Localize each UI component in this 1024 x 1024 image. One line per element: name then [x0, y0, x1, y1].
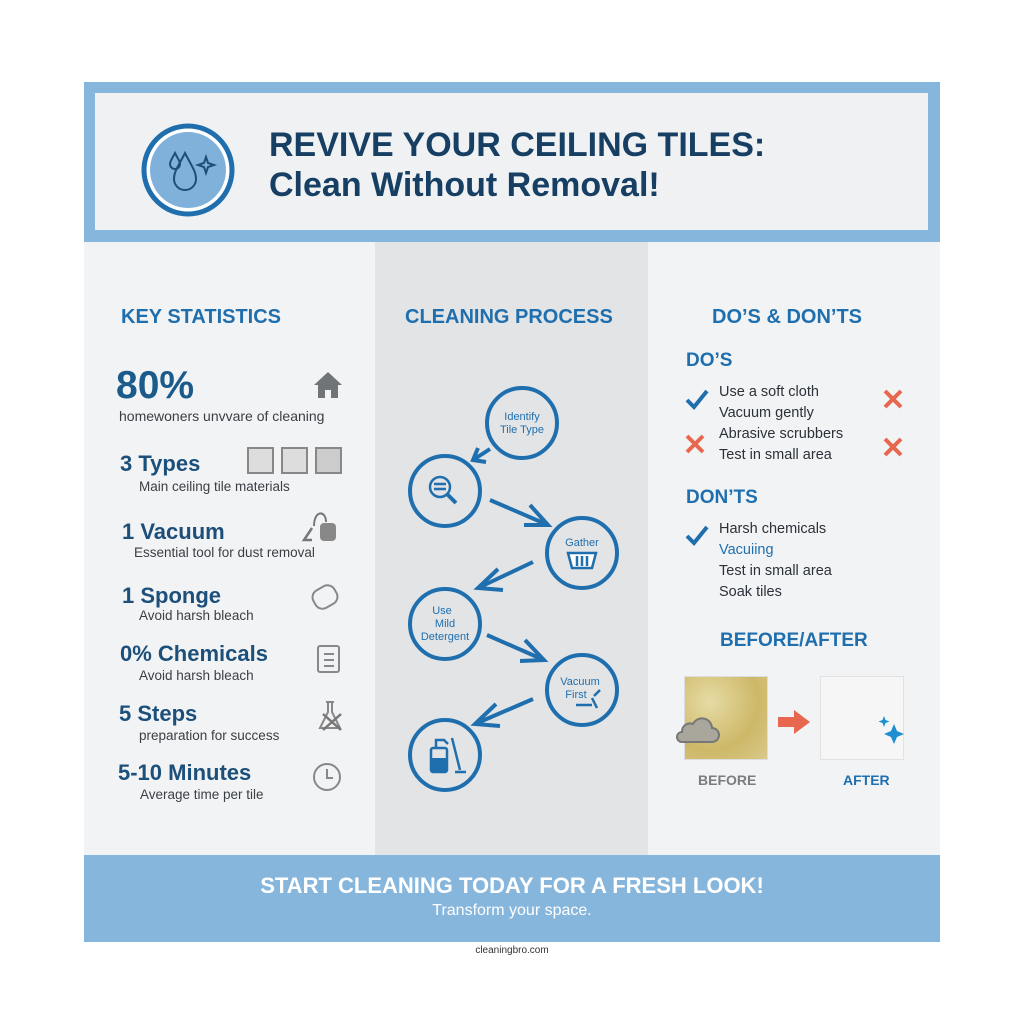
don'ts list: Test in small area: [719, 563, 832, 579]
stat vacuum: [122, 512, 336, 560]
panel: cleaning process: [375, 242, 648, 855]
do's list: [719, 384, 843, 463]
title: [269, 126, 765, 204]
website credit: cleaningbro.com: [475, 945, 549, 956]
icon: clock: [313, 763, 341, 791]
do's list: Abrasive scrubbers: [719, 426, 843, 442]
stat chemicals: Avoid harsh bleach: [139, 668, 254, 683]
icon: water drops badge: [142, 124, 234, 216]
do's list: Vacuum gently: [719, 405, 814, 421]
heading: CLEANING PROCESS: [405, 306, 613, 328]
flowchart: Mild: [435, 618, 455, 630]
title: REVIVE YOUR CEILING TILES:: [269, 126, 765, 164]
stat 80%: [116, 364, 342, 424]
icon: sparkle: [878, 716, 904, 744]
flowchart: Identify: [504, 411, 540, 423]
call to action: START CLEANING TODAY FOR A FRESH LOOK!: [260, 873, 764, 898]
stat 3 types: Main ceiling tile materials: [139, 479, 290, 494]
don'ts list: Soak tiles: [719, 584, 782, 600]
don'ts list: Harsh chemicals: [719, 521, 826, 537]
header inner panel: [95, 93, 928, 230]
flowchart: Detergent: [421, 631, 469, 643]
stat sponge: Avoid harsh bleach: [139, 608, 254, 623]
icon: clipboard: [317, 645, 340, 673]
icon: cross: [686, 434, 704, 454]
subheading: do's: DO’S: [686, 350, 732, 371]
stat 80%: homewoners unvvare of cleaning: [119, 408, 324, 424]
subheading: don'ts: DON’TS: [686, 487, 758, 508]
icon: check: [686, 390, 708, 410]
icon: flask crossed: [318, 701, 342, 731]
don'ts list: [719, 521, 832, 600]
do's list: Use a soft cloth: [719, 384, 819, 400]
subtitle: Transform your space.: [432, 902, 592, 919]
icon: house: [314, 372, 342, 398]
flowchart: [408, 386, 619, 792]
flowchart: Gather: [565, 537, 599, 549]
stat minutes: [118, 760, 341, 802]
after tile: [820, 676, 904, 760]
arrow: [778, 710, 810, 734]
footer banner: [84, 855, 940, 942]
icon: sponge: [312, 584, 338, 610]
do's list: Test in small area: [719, 447, 832, 463]
header band: [84, 82, 940, 242]
stat vacuum: 1 Vacuum: [122, 519, 225, 544]
stat steps: preparation for success: [139, 728, 279, 743]
label before: BEFORE: [698, 772, 756, 788]
stat minutes: Average time per tile: [140, 787, 264, 802]
stat steps: [119, 701, 342, 743]
don'ts list: Vacuiing: [719, 542, 774, 558]
flowchart: First: [565, 689, 587, 701]
icon: cross: [884, 390, 902, 408]
stat 3 types: [120, 447, 342, 494]
icon: vacuum: [302, 512, 336, 542]
label after: AFTER: [843, 772, 890, 788]
stat sponge: [122, 583, 338, 623]
icon: tiles: [247, 447, 342, 474]
stat vacuum: Essential tool for dust removal: [134, 545, 315, 560]
icon: check: [686, 526, 708, 546]
icon: dust cloud: [676, 717, 720, 743]
heading: DO’S & DON’TS: [712, 306, 862, 328]
heading: before/after: BEFORE/AFTER: [720, 630, 868, 651]
flowchart: Use: [432, 605, 452, 617]
icon: cross: [884, 438, 902, 456]
stat sponge: 1 Sponge: [122, 583, 221, 608]
flowchart: Vacuum: [560, 676, 600, 688]
stat chemicals: 0% Chemicals: [120, 641, 268, 666]
panel: do's and don'ts: [648, 242, 940, 855]
flowchart: Tile Type: [500, 424, 544, 436]
panel: key statistics: [84, 242, 375, 855]
before tile: [684, 676, 768, 760]
stat chemicals: [120, 641, 340, 683]
stat 3 types: 3 Types: [120, 451, 200, 476]
stat steps: 5 Steps: [119, 701, 197, 726]
stat minutes: 5-10 Minutes: [118, 760, 251, 785]
stat 80%: 80%: [116, 364, 194, 407]
heading: KEY STATISTICS: [121, 306, 281, 328]
title: Clean Without Removal!: [269, 166, 660, 204]
